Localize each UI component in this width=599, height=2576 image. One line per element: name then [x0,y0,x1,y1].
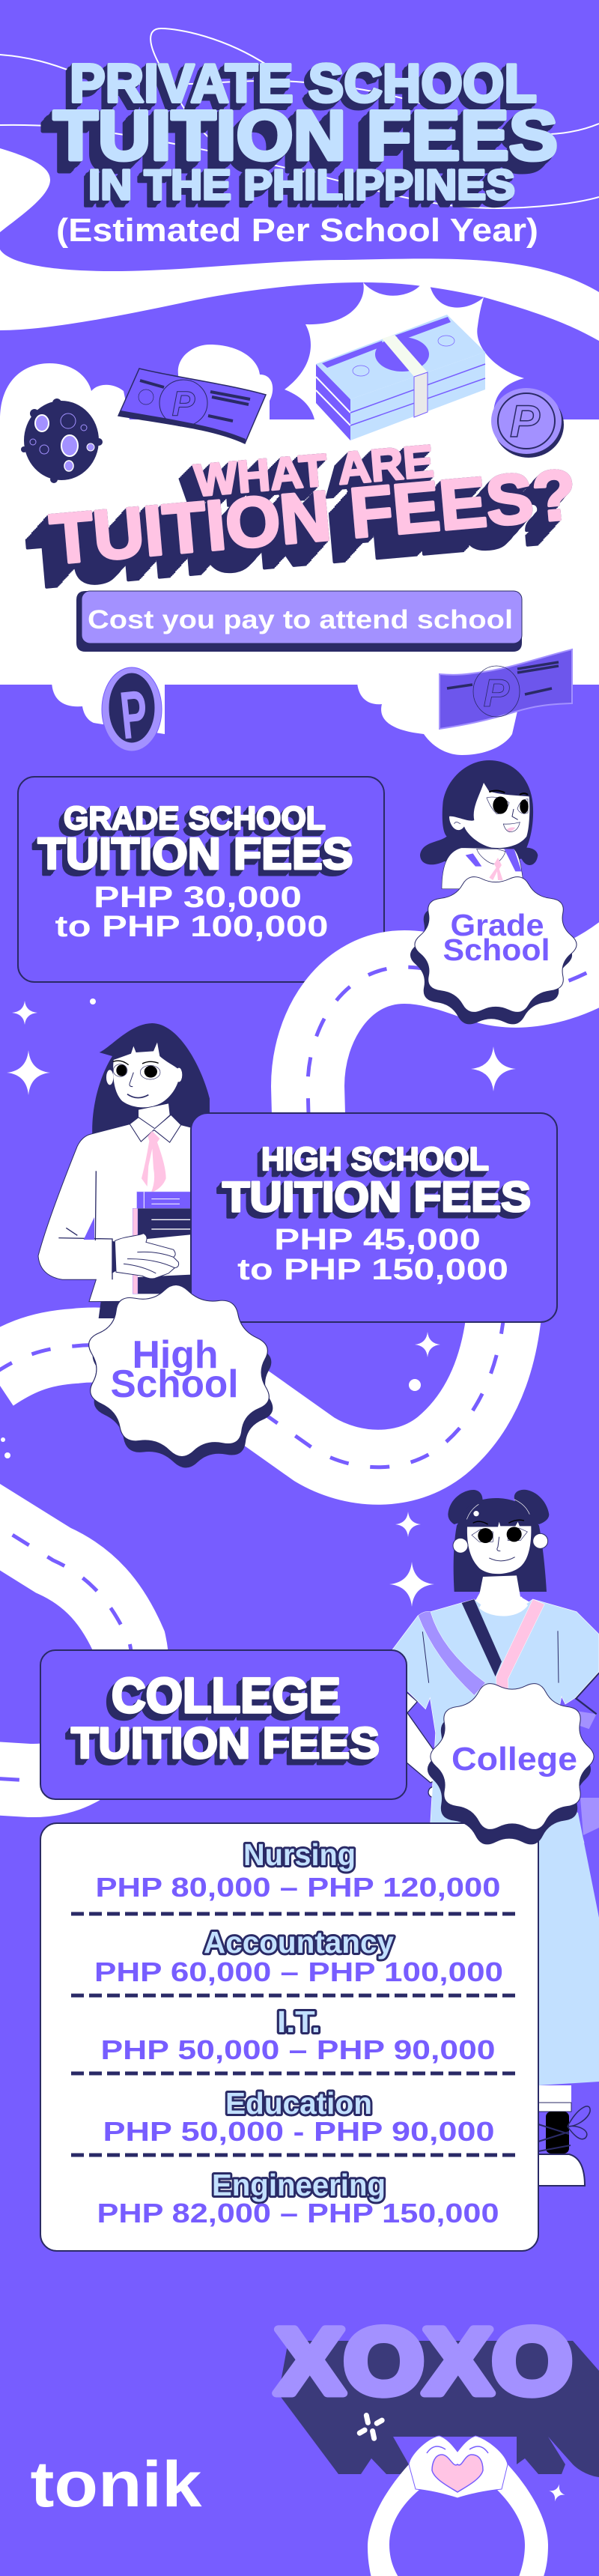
icon: peso bill bottom right: P [484,672,510,715]
course: accountancy: PHP 60,000 – PHP 100,000 [94,1957,503,1987]
high school price: PHP 45,000 [274,1223,481,1256]
character: high school girl [38,1023,210,1318]
course: engineering: Engineering [212,2168,386,2202]
high school heading line 2: TUITION FEES [222,1173,531,1221]
badge text [111,1333,238,1406]
course: nursing [96,1837,500,1903]
badge: grade school [410,877,577,1024]
character: college student skirt and boot [509,1783,599,2186]
badge: college [428,1684,594,1844]
title line 2: TUITION FEES [53,96,558,175]
decorative thin white curves [0,28,599,208]
heading line 2: TUITION FEES? [47,455,579,579]
icon: peso bill bottom right [440,649,572,729]
icon: hands forming a heart [368,2436,548,2576]
course: engineering: PHP 82,000 – PHP 150,000 [97,2198,499,2228]
course: accountancy [94,1925,503,1987]
high school price [237,1223,508,1286]
high school price: to PHP 150,000 [237,1253,508,1286]
course: information technology: PHP 50,000 – PHP 90,000 [100,2034,496,2065]
title line 1: PRIVATE SCHOOL [70,54,537,114]
badge text: High [132,1333,219,1377]
badge text: Grade [451,908,544,942]
panel: high school [191,1113,557,1322]
icon: stack of money [316,315,485,440]
course: education [103,2086,494,2147]
icon: small sparkle [547,2482,568,2503]
course: information technology [100,2004,496,2065]
icon: peso bill top [118,369,266,443]
grade school heading line 2: TUITION FEES [37,829,353,879]
badge text: School [111,1363,238,1406]
panel: grade school [18,777,384,982]
badge text [443,908,550,967]
sparkles and dots [1,998,516,1607]
heading line 1: WHAT ARE [192,436,436,506]
college heading line 1: COLLEGE [112,1667,341,1723]
icon: coin top right: P [510,396,541,446]
white wave shapes behind the title [0,148,599,341]
subtitle: (Estimated Per School Year) [56,212,538,249]
course: engineering [97,2168,499,2228]
icon: moon [21,398,103,483]
icon: coin bottom left [102,667,162,754]
grade school price: to PHP 100,000 [55,910,328,943]
icon: peso bill top: P [172,384,195,423]
badge text: College [451,1741,577,1778]
logo: tonik: tonik [30,2449,202,2521]
course: information technology: I.T. [277,2004,320,2039]
college heading line 2: TUITION FEES [71,1719,380,1768]
badge text: School [443,933,550,967]
panel: college heading [40,1650,407,1799]
title [53,54,558,209]
course: accountancy: Accountancy [204,1925,394,1960]
icon: sparkle cross [356,2412,386,2441]
course: nursing: PHP 80,000 – PHP 120,000 [96,1872,500,1903]
callout: definition [76,591,522,652]
course: education: Education [225,2086,372,2121]
character: college student [392,1490,599,1843]
road: lower curve [0,1513,133,1781]
course: nursing: Nursing [243,1837,356,1872]
grade school price [55,881,328,943]
title line 3: IN THE PHILIPPINES [88,161,515,209]
grade school price: PHP 30,000 [94,881,302,914]
character: grade school girl [420,760,538,889]
panel: what are tuition fees background [0,282,599,755]
panel: college courses card [40,1823,538,2251]
grade school heading line 1: GRADE SCHOOL [64,800,326,837]
badge: high school [64,1264,297,1488]
road: upper curve [308,951,599,1198]
xoxo long shadow [279,2341,599,2477]
road: middle curve [0,1273,506,1467]
icon: coin bottom left: P [117,676,151,754]
course: education: PHP 50,000 - PHP 90,000 [103,2116,494,2147]
heading: what are tuition fees [47,436,579,579]
high school heading line 1: HIGH SCHOOL [261,1141,489,1178]
xoxo heading: XOXO [276,2310,572,2413]
icon: coin top right [491,388,564,458]
callout text: Cost you pay to attend school [88,605,513,634]
